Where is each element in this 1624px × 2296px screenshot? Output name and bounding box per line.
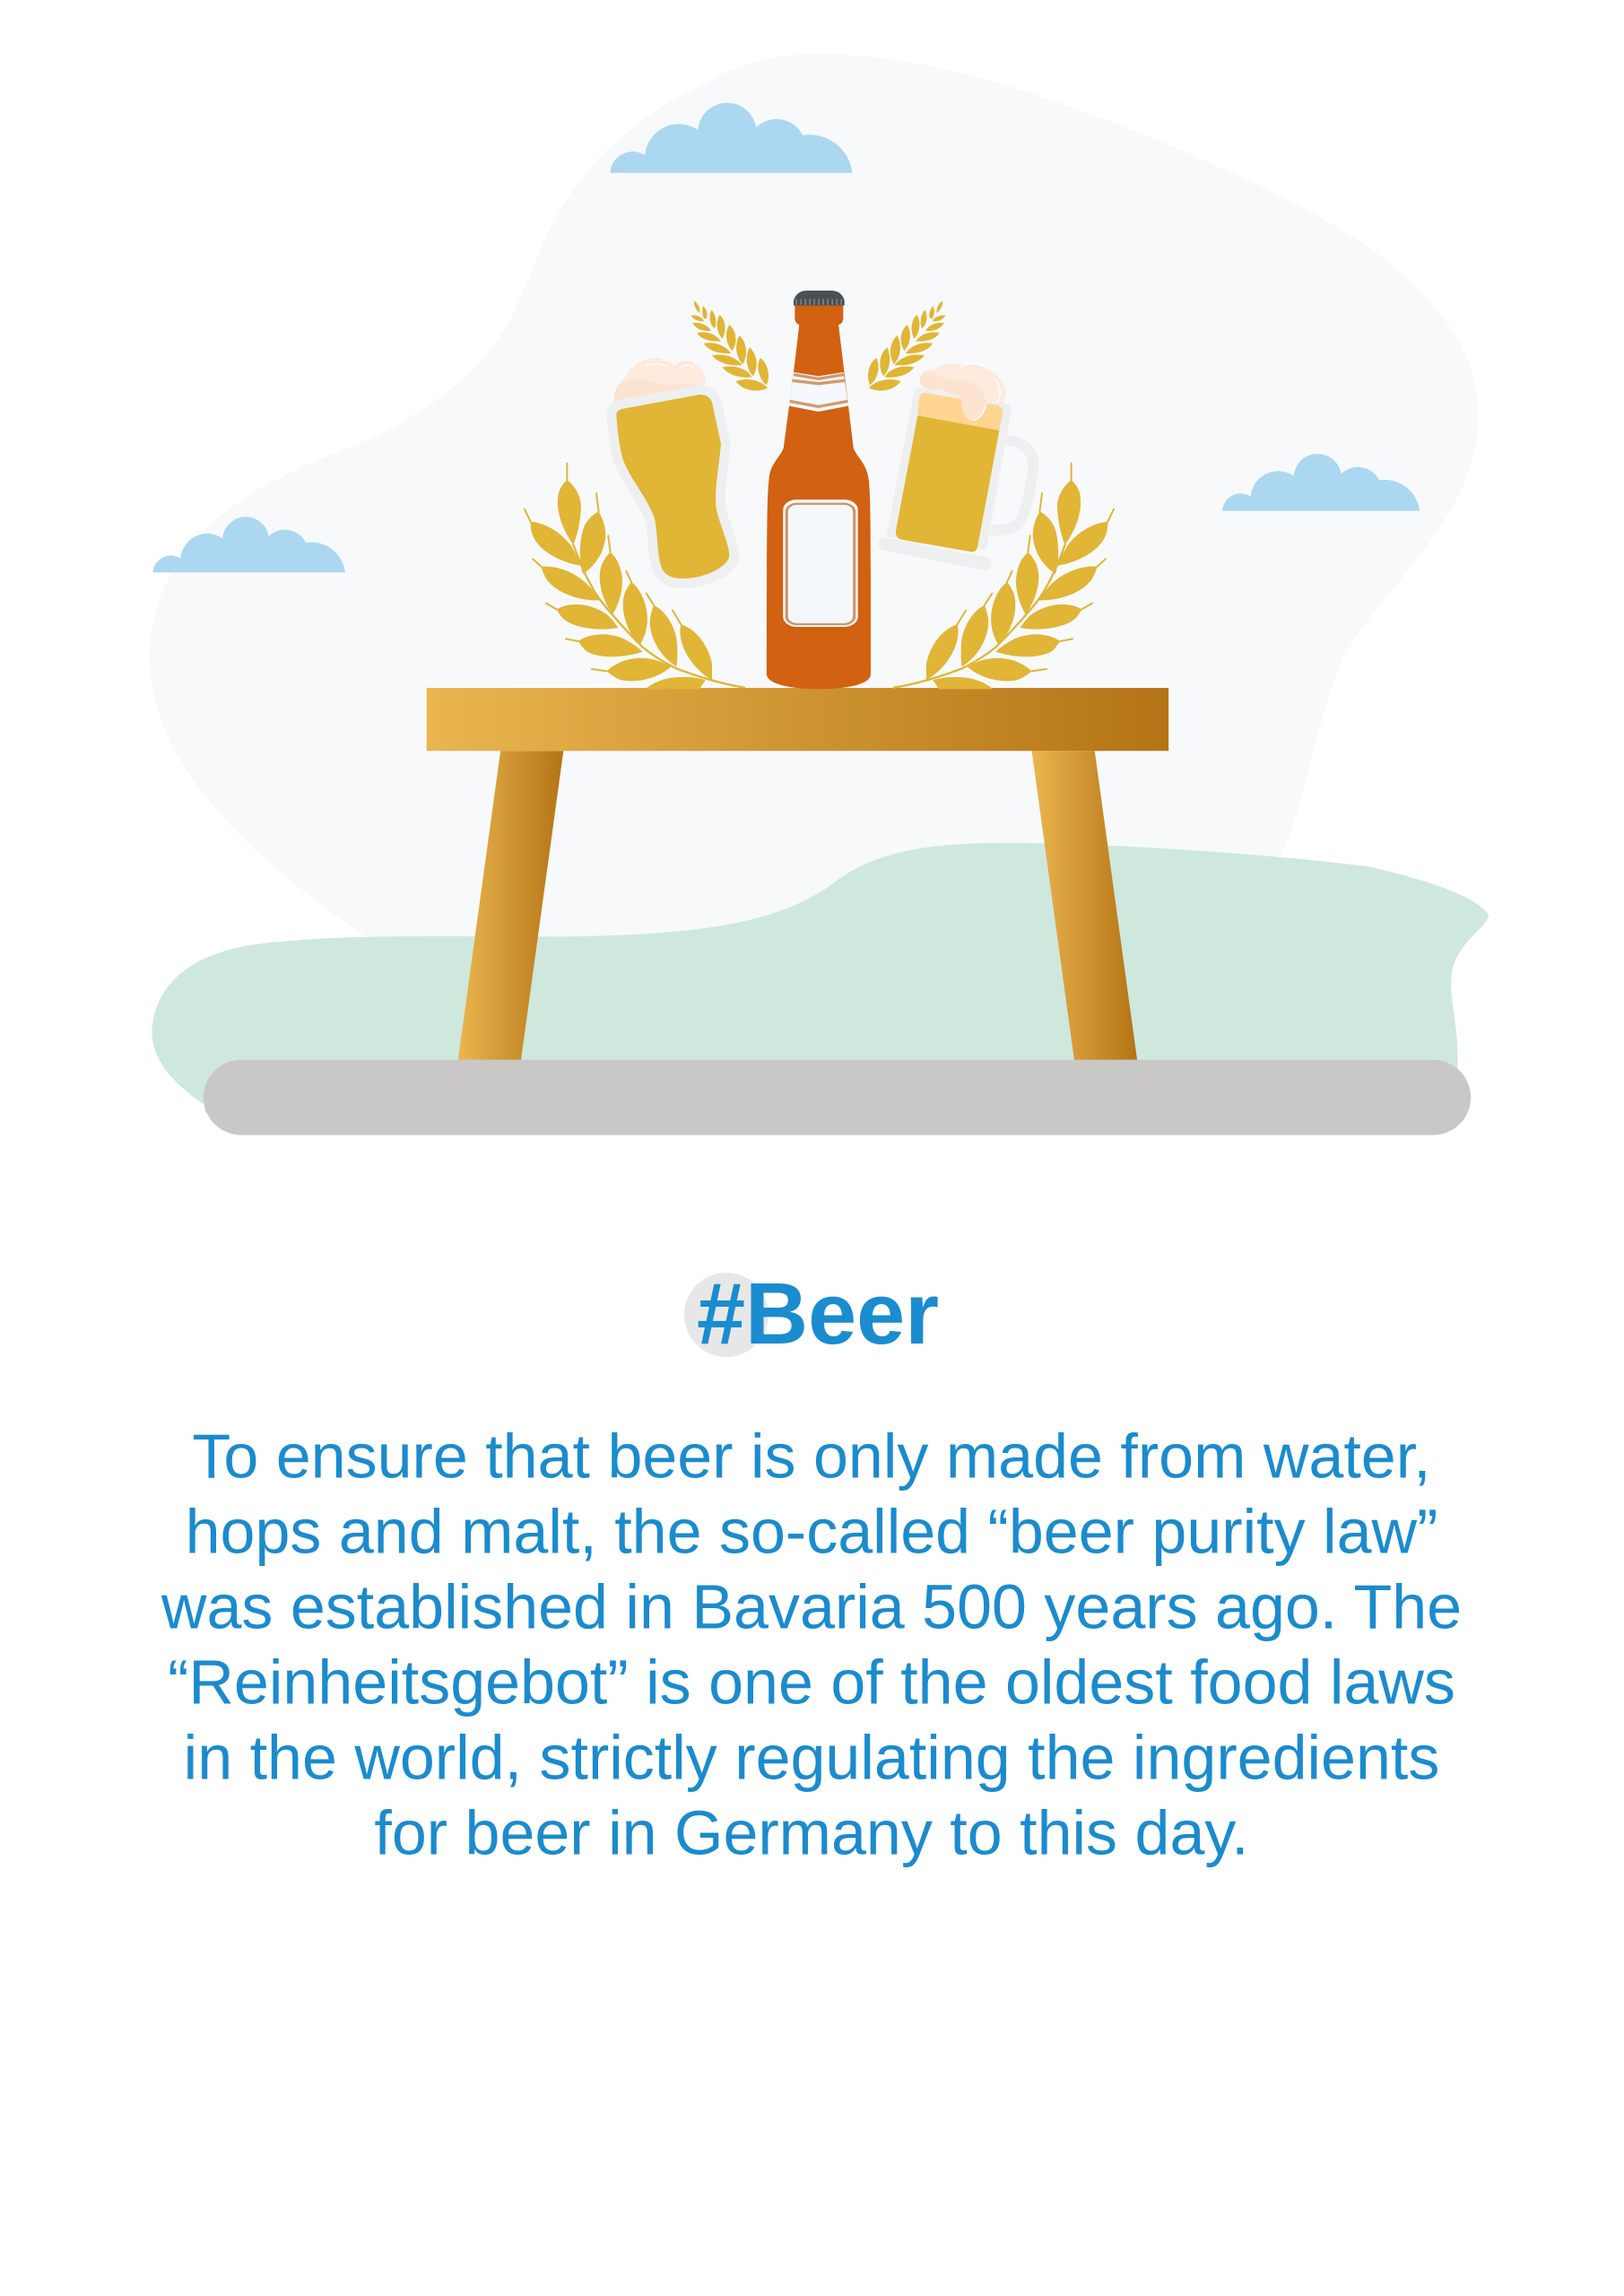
table leg left	[458, 751, 563, 1060]
cap ribs	[795, 293, 843, 311]
cloud: left	[152, 517, 345, 572]
bottle body	[767, 323, 871, 689]
body text: To ensure that beer is only made from water,	[192, 1421, 1431, 1491]
body text: “Reinheitsgebot” is one of the oldest food laws	[168, 1647, 1455, 1717]
mug foot	[885, 544, 985, 563]
hashtag circle	[684, 1273, 769, 1357]
body text	[161, 1421, 1462, 1867]
beer bottle	[767, 291, 871, 689]
glass body	[616, 395, 729, 578]
foam front	[614, 379, 697, 402]
cloud: top	[610, 103, 852, 173]
cloud: right	[1222, 454, 1420, 511]
mug beer head	[917, 393, 1003, 430]
table leg right	[1032, 751, 1137, 1060]
neck stripes	[790, 375, 847, 406]
mug handle	[991, 440, 1033, 530]
foam back	[614, 358, 706, 402]
body text: was established in Bavaria 500 years ago. The	[161, 1571, 1462, 1641]
heading: #Beer	[697, 1265, 939, 1362]
neck band	[789, 372, 848, 412]
mug foam back	[920, 363, 1006, 421]
table	[427, 688, 1168, 1060]
wheat ear right	[868, 300, 946, 391]
bottle neck detail	[789, 291, 848, 412]
table top	[427, 688, 1168, 751]
body text: in the world, strictly regulating the ingredients	[184, 1722, 1439, 1792]
mug body	[886, 387, 1011, 550]
mug beer	[896, 415, 999, 552]
wheat ear left	[690, 300, 769, 391]
foam highlights	[646, 364, 693, 367]
body text: hops and malt, the so-called “beer purity law”	[186, 1496, 1437, 1566]
laurel left	[525, 464, 744, 689]
bottle cap	[794, 291, 845, 306]
wheat beer glass	[614, 358, 729, 578]
background blob	[149, 54, 1479, 936]
bottle collar	[795, 305, 843, 325]
mug foam front	[920, 372, 986, 421]
laurel right	[894, 464, 1114, 689]
beer	[616, 395, 729, 578]
green hill	[152, 843, 1489, 1112]
bottle label	[783, 500, 858, 627]
mug foam highlights	[960, 364, 1000, 421]
beer mug	[885, 363, 1033, 563]
body text: for beer in Germany to this day.	[374, 1797, 1249, 1867]
ground	[204, 1060, 1471, 1135]
illustration: landscape background	[149, 54, 1489, 1135]
